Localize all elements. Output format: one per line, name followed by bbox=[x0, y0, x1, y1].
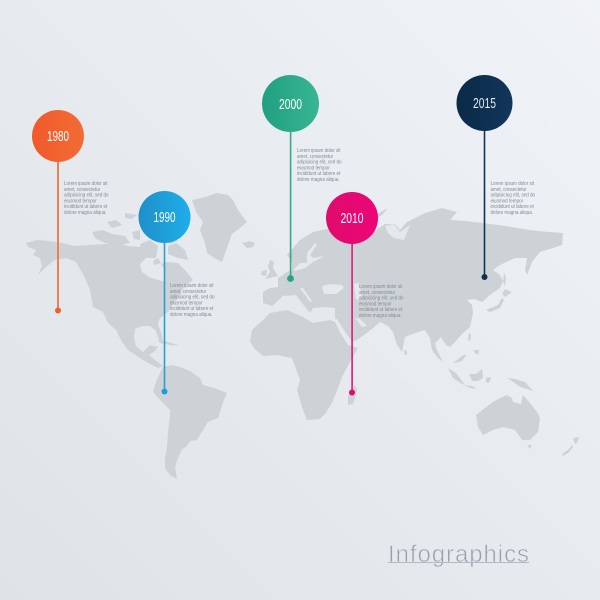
marker: 2010 bbox=[326, 192, 378, 396]
marker: 2015: 2015 bbox=[473, 96, 496, 112]
text block: 2010: eiusmod tempor bbox=[359, 301, 392, 308]
map: UK bbox=[265, 260, 278, 279]
text block: 2010: Lorem ipsum dolor sit bbox=[359, 284, 403, 290]
marker: 2010: 2010 bbox=[340, 211, 364, 227]
marker: 1990 bbox=[138, 191, 190, 394]
map: seas bbox=[270, 224, 410, 327]
text block: 2015: incididunt ut labore et bbox=[490, 204, 534, 210]
text block: 1990: adipisicing elit, sed do bbox=[170, 294, 215, 301]
text block: 1980: dolore magna aliqua. bbox=[64, 210, 107, 216]
map: Red Sea bbox=[333, 319, 352, 345]
text block: 2010: adipisicing elit, sed do bbox=[359, 295, 404, 302]
text block: 2010: incididunt ut labore et bbox=[359, 307, 403, 313]
text block: 2000: incididunt ut labore et bbox=[297, 171, 341, 177]
title: Infographics: Infographics bbox=[388, 541, 529, 568]
map: South America bbox=[153, 365, 227, 479]
map: Eurasia bbox=[263, 208, 563, 362]
text block: 2015: amet, consectetur bbox=[490, 187, 527, 193]
world map bbox=[26, 193, 579, 479]
marker: 1980 bbox=[32, 110, 84, 314]
text block: 1980: adipisicing elit, sed do bbox=[64, 192, 109, 199]
marker: 2000 bbox=[262, 75, 319, 282]
map: Caribbean bbox=[158, 340, 180, 346]
map: Madagascar bbox=[348, 385, 357, 405]
map: Japan bbox=[502, 289, 512, 297]
marker: 1990: 1990 bbox=[154, 210, 176, 226]
map: Sri Lanka bbox=[404, 350, 407, 355]
map: North America bbox=[26, 240, 193, 368]
text block: 1990: Lorem ipsum dolor sit bbox=[170, 283, 214, 289]
marker: 2000: 2000 bbox=[279, 97, 302, 113]
text block: 1980: Lorem ipsum dolor sit bbox=[64, 181, 108, 187]
text block: 1990: dolore magna aliqua. bbox=[170, 312, 213, 318]
map: Australia bbox=[476, 395, 540, 440]
map: Greenland bbox=[192, 193, 247, 262]
text block: 2015: eiusmod tempor bbox=[490, 198, 524, 205]
text block: 2000: dolore magna aliqua. bbox=[297, 177, 340, 183]
text block: 2015: dolore magna aliqua. bbox=[490, 210, 533, 216]
map: Novaya Zemlya bbox=[377, 208, 388, 218]
map: Iceland bbox=[242, 241, 255, 248]
map: Southeast Asia islands bbox=[448, 333, 535, 392]
text block: 1980: eiusmod tempor bbox=[64, 198, 97, 205]
text block: 2015: adipisicing elit, sed do bbox=[490, 192, 535, 199]
marker: 2015 bbox=[456, 75, 512, 280]
marker: 1980: 1980 bbox=[47, 129, 69, 145]
map: Tasmania bbox=[527, 445, 532, 449]
text block: 1990: eiusmod tempor bbox=[170, 300, 203, 307]
text block: 2000: amet, consectetur bbox=[297, 154, 334, 160]
text block: 1990: incididunt ut labore et bbox=[170, 306, 214, 312]
map: Arctic islands bbox=[92, 213, 188, 265]
map: Sakhalin bbox=[503, 272, 506, 286]
text block: 2000: adipisicing elit, sed do bbox=[297, 159, 342, 166]
text block: 2010: amet, consectetur bbox=[359, 290, 396, 296]
text block: 1990: amet, consectetur bbox=[170, 289, 207, 295]
map: New Zealand bbox=[562, 445, 573, 456]
text block: 1980: incididunt ut labore et bbox=[64, 204, 108, 210]
text block: 1980: amet, consectetur bbox=[64, 187, 101, 193]
text block: 2010: dolore magna aliqua. bbox=[359, 313, 402, 319]
text block: 2000: eiusmod tempor bbox=[297, 165, 330, 172]
text block: 2000: Lorem ipsum dolor sit bbox=[297, 148, 341, 154]
text block: 2015: Lorem ipsum dolor sit bbox=[490, 181, 535, 187]
map: Africa bbox=[250, 310, 358, 420]
